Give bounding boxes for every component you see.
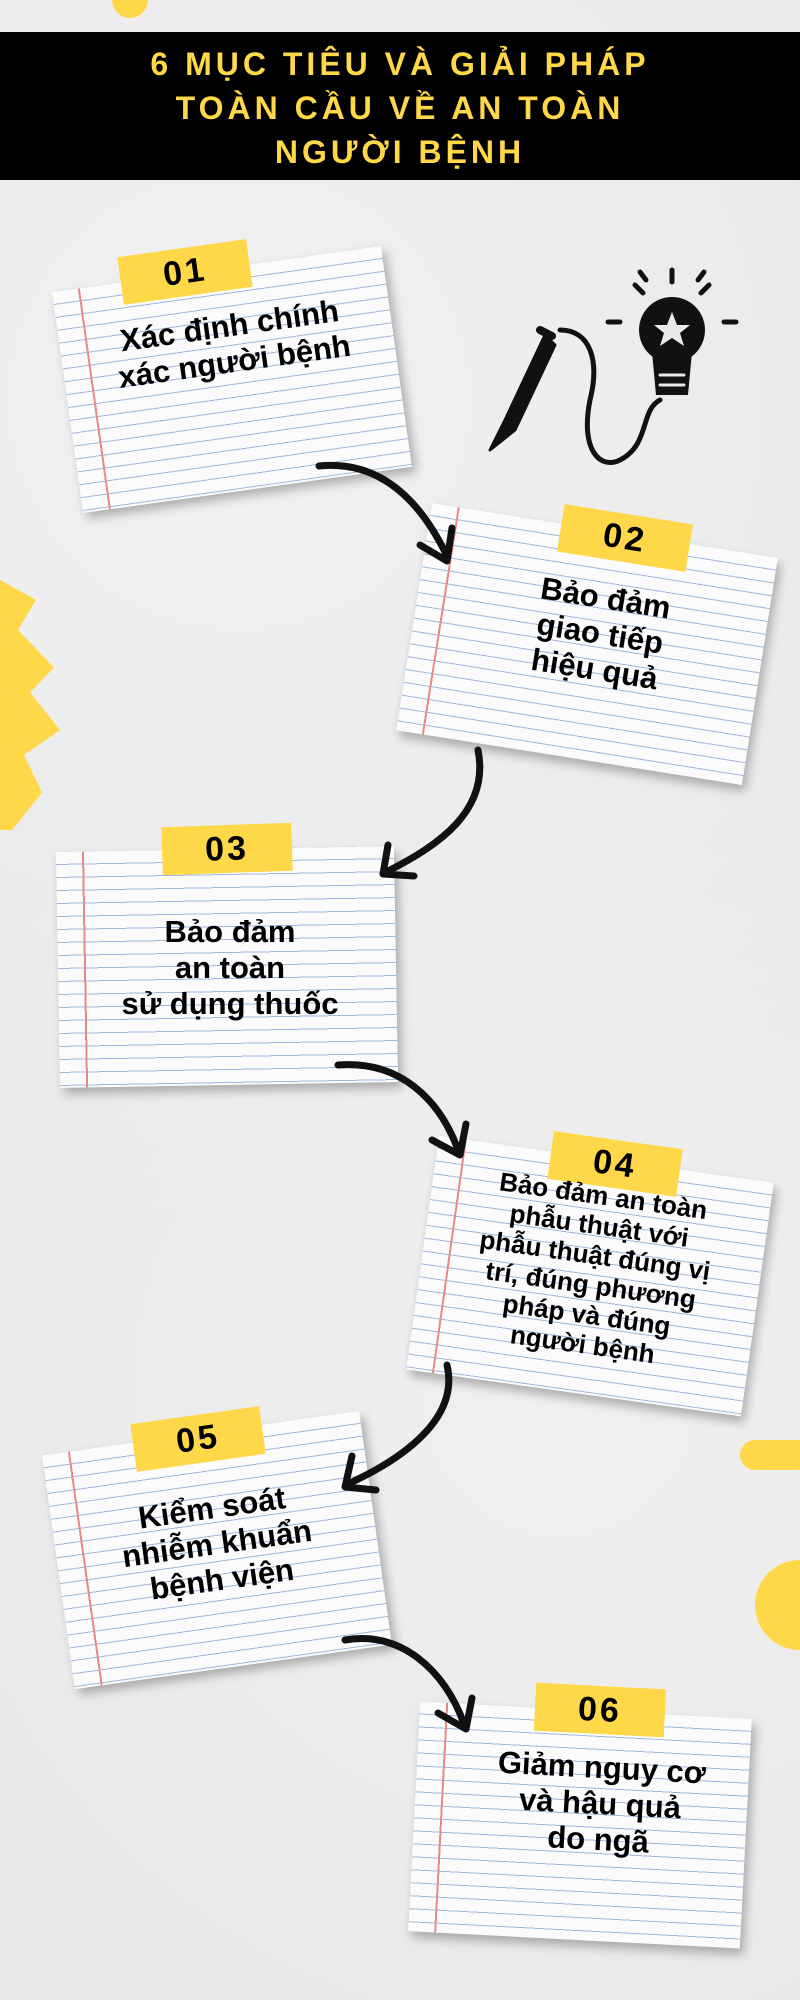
text 4 [478,1166,712,1369]
tag 06: 06 [577,1690,623,1730]
text 1 [116,293,353,395]
splash: right [740,1440,800,1470]
text 4: pháp và đúng [501,1288,673,1341]
tag 02: 02 [600,516,650,560]
text 4: trí, đúng phương [484,1255,698,1314]
text 3: sử dụng thuốc [121,986,339,1021]
text 4: người bệnh [508,1319,657,1369]
text 5: nhiễm khuẩn [120,1513,314,1574]
text 3: an toàn [175,950,285,985]
text 6 [497,1745,707,1860]
arrow 4 to 5 [345,1365,449,1490]
tag 05: 05 [174,1417,222,1461]
tag 06 [534,1683,666,1737]
text 5: bệnh viện [148,1552,296,1607]
note 6 [408,1701,752,1949]
text 4: Bảo đảm an toàn [498,1166,709,1225]
note 5 [42,1411,392,1689]
text 1: Xác định chính [118,293,341,358]
icon: pencil and light bulb [490,270,736,462]
text 4: phẫu thuật với [508,1198,691,1253]
title [0,32,800,180]
note 1 [52,246,412,513]
text 2: giao tiếp [534,606,666,661]
arrow 5 to 6 [345,1638,472,1729]
title: 6 MỤC TIÊU VÀ GIẢI PHÁP [150,46,650,82]
note 3 [56,846,398,1088]
text 6: và hậu quả [518,1782,682,1825]
text 5: Kiểm soát [136,1480,288,1535]
text 6: Giảm nguy cơ [497,1745,707,1790]
tag 05 [130,1406,266,1472]
text 2: Bảo đảm [538,570,673,625]
text 6: do ngã [546,1819,650,1860]
text 2: hiệu quả [529,642,660,696]
text 2 [529,570,673,696]
title: NGƯỜI BỆNH [275,134,525,170]
tag 03 [161,823,293,875]
splash: top [112,0,148,18]
arrow 3 to 4 [338,1065,466,1155]
tag 04: 04 [591,1142,639,1186]
text 3: Bảo đảm [165,914,295,949]
title: TOÀN CẦU VỀ AN TOÀN [176,90,624,126]
text 3 [121,914,339,1021]
text 5 [120,1480,314,1607]
tag 01 [117,239,253,305]
tag 04 [547,1131,683,1197]
note 2 [396,503,778,785]
tag 01: 01 [161,250,209,294]
tag 03: 03 [204,829,250,869]
text 1: xác người bệnh [116,328,353,395]
text 4: phẫu thuật đúng vị [478,1224,712,1286]
arrow 1 to 2 [319,465,452,561]
splash: left [0,580,60,830]
splash: right lower [755,1560,800,1650]
tag 02 [557,504,693,572]
arrow 2 to 3 [383,750,480,876]
note 4 [406,1136,774,1416]
